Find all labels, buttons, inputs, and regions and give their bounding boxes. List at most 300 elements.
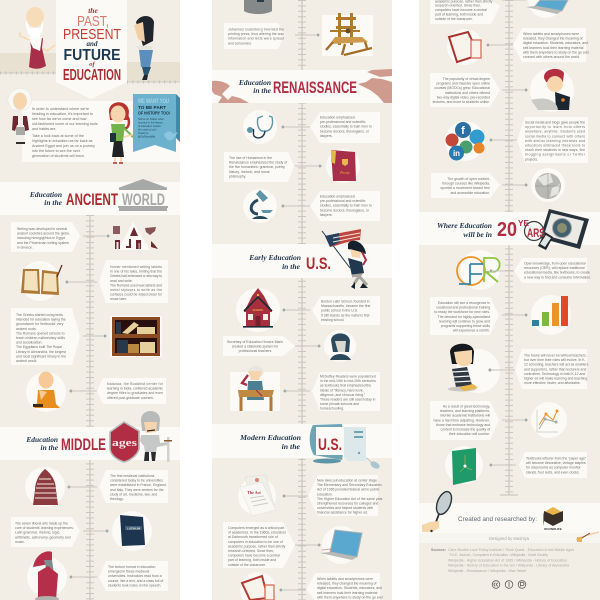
ribbon: we want you: Tweet us bbox=[138, 131, 149, 135]
text: computers emerged continued: outside of the classroom. bbox=[435, 17, 473, 21]
text: open knowledge: a new way to find and consume information. bbox=[524, 275, 591, 279]
text: Nalanda: Nalanda, the Buddhist center for bbox=[107, 382, 164, 386]
icon: green book bbox=[445, 446, 483, 485]
text: Horace Mann bbox=[223, 336, 295, 356]
text: computers emerged: outside of the classroom. bbox=[228, 563, 266, 567]
text: McGuffey Readers: some private schools and bbox=[320, 402, 359, 406]
icon: red poetry book bbox=[326, 149, 360, 183]
icon: social media bubbles: f bbox=[461, 125, 465, 137]
text: federal education acts: Act of 1965 provided federal aid to public bbox=[317, 488, 380, 492]
icon: Latin book bbox=[112, 511, 152, 551]
section band: middle ages: Education bbox=[25, 435, 58, 444]
icon: schoolhouse: SCHOOL bbox=[252, 308, 264, 312]
text: professional studies: pre-professional and scientific bbox=[320, 120, 366, 124]
icon: wax tablet bbox=[20, 261, 62, 301]
intro text panel bbox=[22, 101, 180, 162]
text: federal education acts: universities and helped students with bbox=[317, 506, 373, 510]
text: Homer tablets: surfaces could be wiped clean for bbox=[110, 293, 163, 297]
text: future of teachers: The future will never be without teachers, bbox=[524, 354, 587, 358]
icon: Title Act papers bbox=[238, 475, 276, 516]
title banner: PRESENT bbox=[63, 27, 121, 43]
text: tablets and smartphones (col 2) bbox=[306, 573, 383, 600]
text: medieval universities: and Italy. They were centers for the bbox=[110, 488, 164, 492]
text: humanism: the five humanities: grammar, poetry, bbox=[229, 165, 285, 169]
text: computers emerged continued: part of learning, both inside and bbox=[435, 13, 483, 17]
text: great technology: have a hard time adjusting. However, bbox=[433, 418, 490, 422]
icon: tablet and smartphone bbox=[447, 29, 483, 65]
section band: modern education: Modern Education bbox=[239, 433, 301, 442]
ribbon: we want you bbox=[133, 94, 180, 152]
section band: ancient world: ANCIENT bbox=[66, 190, 118, 209]
footer band: created and researched: Created and researched by: bbox=[458, 516, 537, 523]
sources: Sources: bbox=[431, 548, 446, 552]
section band: ancient world: WORLD bbox=[122, 190, 165, 209]
text: future of teachers: controllers. Technology in both K-12 and bbox=[524, 372, 585, 376]
intro text panel: Take a look back at some of the bbox=[32, 134, 84, 138]
text: lecture format: universities. Instructors read from a bbox=[108, 574, 162, 578]
icon: smiling boy at laptop bbox=[530, 68, 574, 112]
text: Gutenberg: information and texts were spread bbox=[228, 37, 284, 41]
text: medieval universities: were established in France, England, bbox=[110, 483, 167, 487]
section band: renaissance: RENAISSANCE bbox=[273, 78, 357, 97]
text: Homer tablets: metal styluses to write as the bbox=[110, 288, 162, 292]
text: tablets and smartphones: When tablets and smartphones were bbox=[523, 32, 579, 36]
text: Greeks, Romans, Egyptians: intended for education laying the bbox=[16, 318, 66, 322]
text: vocational training: learning will continue to grow and bbox=[439, 319, 490, 323]
text: future of teachers: more effective, faster, and affordable. bbox=[524, 381, 581, 385]
text: tablets and smartphones (col 2): released, they changed the meaning of bbox=[317, 582, 376, 586]
text: social media: reach their students in new ways, like bbox=[525, 148, 585, 152]
text: vocational training: vocational and professional training bbox=[436, 306, 490, 310]
text: social media: social media to connect with others bbox=[525, 134, 585, 138]
text: great technology: mid-tier academic institutions will bbox=[440, 414, 490, 418]
text: Homer tablets: in one of his tales, hinting that the bbox=[110, 270, 162, 274]
intro text panel: see how far we've come and how bbox=[32, 117, 87, 121]
text: vocational training bbox=[430, 297, 499, 335]
text: future of teachers: and supporters, rather than lecturers and bbox=[524, 367, 586, 371]
text: vocational training: Education will see a resurgence in bbox=[438, 301, 490, 305]
ribbon: we want you: of education means bbox=[138, 124, 161, 128]
text: open knowledge bbox=[514, 258, 591, 283]
text: writing developed: Writing was developed in several bbox=[17, 227, 67, 231]
text: social media: projects. bbox=[525, 157, 538, 161]
sources: Wikipedia - History of Education in the US / Wikipedia - Library of Alexandria bbox=[448, 564, 569, 568]
text: professional studies bbox=[310, 112, 380, 143]
text: virtual degree programs bbox=[430, 73, 500, 107]
text: virtual degree programs: institutions and others offered bbox=[445, 91, 490, 95]
text: Boston Latin School: Boston Latin School, founded in bbox=[321, 300, 370, 304]
text: seven liberal arts bbox=[11, 517, 80, 547]
icon: hieroglyphs bbox=[113, 222, 158, 250]
text: Homer tablets: The Romans used wax tablets and bbox=[110, 283, 162, 287]
text: medieval universities: study of art, medicine, law, and bbox=[110, 492, 157, 496]
text: open content bbox=[431, 173, 500, 198]
text: professional studies: Education emphasized bbox=[320, 116, 355, 120]
text: open knowledge: resources (OER), will replace traditional bbox=[524, 266, 585, 270]
text: writing developed: including hieroglyphics in Egypt bbox=[17, 236, 65, 240]
text: seven liberal arts: core of students' learning experiences: bbox=[15, 526, 74, 530]
title banner: and bbox=[87, 40, 98, 48]
title banner: EDUCATION bbox=[63, 67, 121, 84]
text: textbooks bbox=[519, 452, 587, 478]
text: Horace Mann: created a statewide system for bbox=[232, 345, 279, 349]
intro text panel: highlights in education as far back as bbox=[32, 139, 93, 143]
text: McGuffey Readers: ideals of "literacy, hard work, bbox=[320, 388, 364, 392]
text: professional studies repeated: Education emphasized bbox=[320, 194, 355, 198]
text: McGuffey Readers: These readers are still used today in bbox=[320, 398, 375, 402]
text: virtual degree programs: courses (MOOCs) grew. Educational bbox=[434, 86, 490, 90]
title banner: the bbox=[88, 6, 98, 15]
section band: early education: Early Education bbox=[248, 253, 301, 262]
text: great technology: those that embrace technology and bbox=[436, 423, 490, 427]
text: medieval universities: theology. bbox=[110, 497, 124, 501]
section band: modern education bbox=[212, 424, 392, 458]
text: Homer tablets: Greeks had embraced a new way to bbox=[110, 274, 162, 278]
text: textbooks: stands, foot rests, and even clocks. bbox=[526, 470, 580, 474]
text: computers emerged: part of learning, both inside and bbox=[228, 558, 276, 562]
sources: Clare Boothe Luce Policy Institute / Think Quest - Education in the Middle Ages bbox=[448, 548, 574, 552]
text: professional studies repeated: pre-professional and scientific bbox=[320, 199, 366, 203]
text: great technology: their education will survive. bbox=[449, 432, 490, 436]
text: virtual degree programs: The popularity of virtual degree bbox=[443, 77, 490, 81]
text: computers emerged continued bbox=[430, 0, 500, 24]
text: professional studies: become doctors, theologians, or bbox=[320, 129, 370, 133]
icon: magnifying glass and hand bbox=[422, 489, 455, 532]
text: social media: blogging assignments or Twitter bbox=[525, 153, 586, 157]
section band: early education: U.S. bbox=[306, 254, 331, 273]
text: computers emerged: computers have become a central bbox=[228, 554, 280, 558]
text: Nalanda: learning in India, conferred academic bbox=[107, 387, 163, 391]
chart: rising bars bbox=[531, 295, 571, 335]
text: seven liberal arts: music. bbox=[15, 540, 25, 544]
character: renaissance woman bbox=[134, 16, 154, 80]
text: Greeks, Romans, Egyptians: The Greeks started using texts bbox=[16, 313, 63, 317]
section band: ancient world: Education bbox=[29, 190, 62, 199]
intro text panel: generation of students will learn. bbox=[32, 154, 85, 158]
text: computers emerged bbox=[223, 522, 295, 568]
text: textbooks: for classrooms as computer monitor bbox=[526, 466, 581, 470]
icon: stethoscope bbox=[243, 110, 277, 144]
logo: Roundlife: ROUNDLIFE bbox=[544, 527, 562, 531]
text: writing developed bbox=[11, 222, 80, 252]
text: federal education acts: education. bbox=[317, 492, 333, 496]
text: McGuffey Readers: homeschooling. bbox=[320, 407, 344, 411]
text: seven liberal arts: The seven liberal arts made up the bbox=[15, 522, 68, 526]
text: social media: educators embraced these tools to bbox=[525, 144, 585, 148]
sources: Wikipedia - Renaissance / Wikipedia - Wax Tablet bbox=[448, 569, 526, 573]
section band: renaissance bbox=[212, 69, 392, 103]
footer credit: designed by bbox=[419, 532, 600, 543]
text: Greeks, Romans, Egyptians: The Egyptians built The Royal bbox=[16, 345, 62, 349]
text: Boston Latin School: It still stands as the nation's first bbox=[321, 313, 369, 317]
text: tablets and smartphones (col 2): digital education. Students, educators, and bbox=[317, 586, 382, 590]
title banner: FUTURE bbox=[64, 47, 121, 64]
text: future of teachers: higher ed will make learning and teaching bbox=[524, 376, 587, 380]
text: virtual degree programs: programs and massive open online bbox=[436, 82, 490, 86]
text: lecture format bbox=[99, 561, 168, 591]
base of scholar statue bbox=[244, 0, 272, 14]
text: social media: Social media and blogs gave people the bbox=[525, 120, 585, 124]
section band: 20 years: 20 bbox=[497, 219, 517, 241]
section band: middle ages: in the bbox=[41, 443, 59, 452]
text: Homer tablets: read and write. bbox=[110, 279, 133, 283]
ribbon: we want you: TO BE PART bbox=[138, 105, 166, 110]
text: great technology: teachers, and learning platforms, bbox=[440, 409, 490, 413]
text: Greeks, Romans, Egyptians: teach children rudimentary skills bbox=[16, 336, 65, 340]
icon: Wikipedia globe bbox=[531, 168, 565, 202]
ribbon: we want you: Tell us on Twitter what bbox=[138, 117, 164, 121]
text: writing developed: and the Phoenician writing system bbox=[17, 241, 69, 245]
text: tablets and smartphones: self-learners took their learning material bbox=[523, 46, 584, 50]
text: lecture format: emerged in these medieval bbox=[108, 570, 150, 574]
section heading: years lettering: ARS bbox=[527, 226, 545, 240]
timeline spine: column 3 bbox=[500, 0, 518, 495]
ribbon: we want you: the most to you! bbox=[138, 128, 157, 132]
icons: creative commons bbox=[492, 581, 526, 588]
icon: Title Act papers: The Act bbox=[247, 490, 261, 495]
header: tan floor and rulers bbox=[0, 53, 180, 82]
text: tablets and smartphones: digital education. Students, educators, and bbox=[523, 41, 588, 45]
icon: social media bubbles bbox=[445, 121, 485, 161]
text: seven liberal arts: Latin grammar, rhetoric, logic, bbox=[15, 531, 60, 535]
text: Greeks, Romans, Egyptians: ancient world. bbox=[16, 359, 37, 363]
title banner: PAST, bbox=[77, 14, 109, 30]
section heading: years lettering bbox=[518, 218, 545, 240]
text: professional studies: studies, essentially to train men to bbox=[320, 125, 372, 129]
text: federal education acts: The Higher Education Act of the same year bbox=[317, 497, 383, 501]
icon: red poetry book: Poetry bbox=[339, 171, 350, 175]
text: McGuffey Readers: McGuffey Readers were popularized bbox=[320, 374, 376, 378]
text: federal education acts bbox=[308, 475, 383, 516]
text: Gutenberg: and consumed. bbox=[228, 41, 252, 45]
section band: early education bbox=[212, 244, 392, 278]
text: computers emerged: academic purpose, rather than strictly bbox=[228, 544, 286, 548]
text: humanism: philosophy. bbox=[229, 174, 246, 178]
icon: microscope bbox=[243, 189, 277, 223]
text: McGuffey Readers: as textbooks that emphasized the bbox=[320, 384, 371, 388]
text: professional studies repeated: become doctors, theologians, or bbox=[320, 208, 370, 212]
text: professional studies repeated: lawyers. bbox=[320, 213, 333, 217]
text: Boston Latin School: Massachusetts, became the first bbox=[321, 304, 370, 308]
text: Homer tablets: Homer mentioned writing tablets bbox=[110, 265, 162, 269]
text: Gutenberg bbox=[224, 23, 285, 49]
icon: laptop continued bbox=[526, 0, 568, 18]
text: open content: The growth of open content, bbox=[447, 177, 490, 181]
text: federal education acts: strengthened resources for colleges and bbox=[317, 502, 378, 506]
ribbon: we want you: OF HISTORY TOO! bbox=[138, 110, 170, 116]
text: Homer tablets bbox=[99, 260, 168, 303]
icon: medieval scholar bbox=[27, 551, 67, 600]
text: writing developed: in Greece. bbox=[17, 245, 33, 249]
text: Gutenberg: Johannes Gutenberg invented the bbox=[228, 28, 284, 32]
text: McGuffey Readers: diligence, and virtuous living." bbox=[320, 393, 366, 397]
section band: modern education: in the bbox=[282, 442, 301, 451]
text: Nalanda bbox=[97, 378, 166, 404]
text: federal education acts: The Elementary and Secondary Education bbox=[317, 483, 382, 487]
character: flag bearer bbox=[322, 229, 368, 289]
text: professional studies repeated bbox=[310, 191, 380, 221]
icon: tablet and smartphone (col 2) bbox=[240, 572, 276, 600]
title banner: of bbox=[89, 61, 96, 68]
icon: OER letters bbox=[457, 250, 500, 290]
chart: line graph bbox=[531, 402, 567, 438]
logo: Roundlife bbox=[543, 507, 563, 531]
text: Homer tablets: reuse later. bbox=[110, 297, 127, 301]
text: computers emerged continued: research-oriented. Since then, bbox=[435, 4, 481, 8]
intro text panel: Ancient Egypt and join us on a journey bbox=[32, 144, 95, 148]
text: Boston Latin School bbox=[312, 296, 380, 325]
icon: schoolhouse bbox=[236, 288, 280, 332]
text: Boston Latin School: existing school. bbox=[321, 318, 345, 322]
text: social media: with similar learning interests and bbox=[525, 139, 585, 143]
text: vocational training: The demand for highly-specialized bbox=[438, 315, 490, 319]
text: computers emerged: Computers emerged as a critical part bbox=[228, 526, 284, 530]
text: social media: anywhere, anytime. Students used bbox=[525, 130, 585, 134]
text: medieval universities bbox=[99, 470, 168, 503]
sources bbox=[431, 548, 574, 573]
intro text panel: into the future to see the next bbox=[32, 149, 80, 153]
text: Horace Mann: professional teachers bbox=[239, 349, 272, 353]
section band: middle ages bbox=[0, 427, 180, 460]
title banner bbox=[56, 0, 127, 99]
intro text panel: and habits are. bbox=[32, 127, 56, 131]
text: Gutenberg: printing press, thus altering the way bbox=[228, 32, 284, 36]
ribbon: we want you: moment in the history bbox=[138, 120, 163, 124]
text: open knowledge: educational media, like textbooks, to create bbox=[524, 271, 590, 275]
text: Nalanda: degree titles to graduates and even bbox=[107, 391, 163, 395]
text: Greeks, Romans, Egyptians: The Romans opened schools to bbox=[16, 331, 65, 335]
text: computers emerged: research-oriented. Since then, bbox=[228, 549, 274, 553]
text: federal education acts: New laws put education at center stage. bbox=[317, 478, 378, 482]
character: knight bbox=[140, 411, 172, 462]
text: social media: opportunity to learn from others bbox=[525, 125, 585, 129]
text: future of teachers: but over time their roles will evolve. In K- bbox=[524, 358, 586, 362]
icon: tablet, phone and magnifier bbox=[524, 209, 589, 250]
text: seven liberal arts: arithmetic, astronomy, geometry and bbox=[15, 535, 71, 539]
shield: ages bbox=[110, 422, 139, 462]
text: humanism: history, rhetoric, and moral bbox=[229, 170, 270, 174]
icon: student at desk bbox=[230, 366, 280, 411]
icon: monk bbox=[26, 372, 66, 412]
text: textbooks: Textbooks leftover from the "paper age" bbox=[526, 456, 587, 460]
footer credit: designed by: Designed by Mashiya bbox=[489, 536, 530, 541]
text: lecture format: source, like a text, and a class full of bbox=[108, 579, 163, 583]
section band: ancient world: in the bbox=[44, 198, 63, 207]
section band: renaissance: Education bbox=[238, 78, 271, 87]
text: tablets and smartphones (col 2): self-learners took their learning material bbox=[317, 591, 378, 595]
character: teacher bbox=[109, 102, 135, 163]
text: Greeks, Romans, Egyptians: and socialization. bbox=[16, 341, 42, 345]
text: open content: spurred a movement toward free bbox=[440, 186, 490, 190]
icon: desktop computer with U.S.: U.S. bbox=[318, 435, 342, 454]
text: textbooks: will become decorative, vintage staples bbox=[526, 461, 586, 465]
intro text panel: heading in education, it's important to bbox=[32, 112, 93, 116]
intro text panel: old-fashioned some of our learning tools bbox=[32, 122, 98, 126]
text: humanism bbox=[224, 152, 294, 182]
icon: bookshelf bbox=[110, 316, 162, 357]
text: lecture format: students took notes on the speech. bbox=[108, 583, 161, 587]
text: Greeks, Romans, Egyptians: groundwork for 'textbooks' very bbox=[16, 322, 64, 326]
text: medieval universities: considered today to be universities bbox=[110, 479, 163, 483]
timeline spine: column 1 bbox=[89, 215, 91, 600]
section band: ancient world bbox=[0, 179, 180, 215]
text: Horace Mann: Secretary of Education Horace Mann bbox=[227, 340, 283, 344]
text: professional studies repeated: studies, essentially to train men to bbox=[320, 204, 372, 208]
text: tablets and smartphones: with them anywhere to study on the go and bbox=[523, 50, 589, 54]
section band: renaissance: in the bbox=[253, 86, 272, 95]
icon: printing press bbox=[322, 13, 373, 56]
ribbon: we want you: WE WANT YOU bbox=[138, 99, 169, 105]
text: open content: and accessible education. bbox=[450, 191, 490, 195]
text: federal education acts: financial assistance for higher ed. bbox=[317, 511, 368, 515]
text: tablets and smartphones (col 2): When tablets and smartphones were bbox=[317, 577, 373, 581]
section band: early education: in the bbox=[282, 262, 301, 271]
icon: Horace Mann portrait bbox=[324, 330, 356, 362]
text: tablets and smartphones: connect with others around the world. bbox=[523, 55, 580, 59]
text: social media bbox=[517, 117, 588, 163]
section heading: years lettering: YE bbox=[518, 218, 529, 228]
text: virtual degree programs: two-way digital video, pre-recorded bbox=[437, 95, 490, 99]
text: future of teachers: 12 schooling, teachers will act as enablers bbox=[524, 363, 589, 367]
text: future of teachers bbox=[515, 349, 589, 389]
text: virtual degree programs: lectures, and more to students online. bbox=[433, 100, 490, 104]
footer band: created and researched bbox=[419, 503, 600, 533]
text: McGuffey Readers bbox=[312, 372, 380, 411]
section band: 20 years: will be in bbox=[463, 230, 492, 239]
section band: 20 years bbox=[419, 212, 600, 245]
text: tablets and smartphones (col 2): with them anywhere to study on the go and bbox=[317, 595, 383, 599]
text: vocational training: will experience a rebirth. bbox=[453, 329, 490, 333]
icon: girl with tablet bbox=[448, 344, 500, 393]
text: tablets and smartphones bbox=[513, 28, 589, 62]
text: computers emerged continued: computers have become a central bbox=[435, 8, 487, 12]
icon: laptop bbox=[320, 526, 362, 564]
text: vocational training: programs supporting these skills bbox=[441, 324, 490, 328]
text: Boston Latin School: public school in the U.S. bbox=[321, 309, 358, 313]
text: tablets and smartphones: released, they changed the meaning of bbox=[523, 37, 582, 41]
text: medieval universities: The first medieval institutions bbox=[110, 474, 155, 478]
text: computers emerged: at Dartmouth transformed role of bbox=[228, 535, 278, 539]
text: McGuffey Readers: in the mid-19th to mid-20th centuries bbox=[320, 379, 376, 383]
text: humanism: The rise of Humanism in the bbox=[229, 156, 272, 160]
sources: Wikipedia - Higher Education Act of 1965 / Wikipedia - History of Education bbox=[448, 558, 567, 562]
text: vocational training: to ready the workforce for new roles. bbox=[434, 310, 490, 314]
text: great technology bbox=[430, 401, 499, 440]
text: open content: through sources like Wikipedia, bbox=[442, 182, 490, 186]
text: open knowledge: Open knowledge, from open educational bbox=[524, 262, 586, 266]
timeline spine: column 2 bbox=[301, 0, 303, 600]
text: computers emerged: computers in education to be one of bbox=[228, 540, 283, 544]
intro text panel: In order to understand where we're bbox=[32, 107, 89, 111]
icon: social media bubbles: in bbox=[453, 149, 460, 158]
icon: Latin book: LATINUM bbox=[127, 526, 141, 530]
text: humanism: Renaissance emphasized the study of bbox=[229, 161, 287, 165]
text: great technology: As a result of great technology, bbox=[443, 404, 490, 408]
ribbon: we want you: @GoRoundlife bbox=[138, 134, 156, 138]
character: wigged colonial man bbox=[8, 88, 31, 144]
icon: cathedral engraving bbox=[25, 467, 65, 507]
text: Greeks, Romans, Egyptians: ancient roots. bbox=[16, 327, 37, 331]
character: ancient philosopher bbox=[20, 7, 55, 69]
text: great technology: content to increase the quality of bbox=[440, 428, 490, 432]
text: computers emerged: of academics. In the 1960s, educators bbox=[228, 531, 286, 535]
section band: 20 years: Where Education bbox=[437, 221, 492, 230]
text: lecture format: The lecture format in education bbox=[108, 565, 155, 569]
text: Greeks, Romans, Egyptians: Library in Alexandria, the longest bbox=[16, 350, 66, 354]
text: professional studies: lawyers. bbox=[320, 134, 333, 138]
text: Greeks, Romans, Egyptians bbox=[11, 308, 80, 365]
sources: T.H.E. Journal - Computers in Education / Wikipedia - Great Society bbox=[449, 553, 548, 557]
